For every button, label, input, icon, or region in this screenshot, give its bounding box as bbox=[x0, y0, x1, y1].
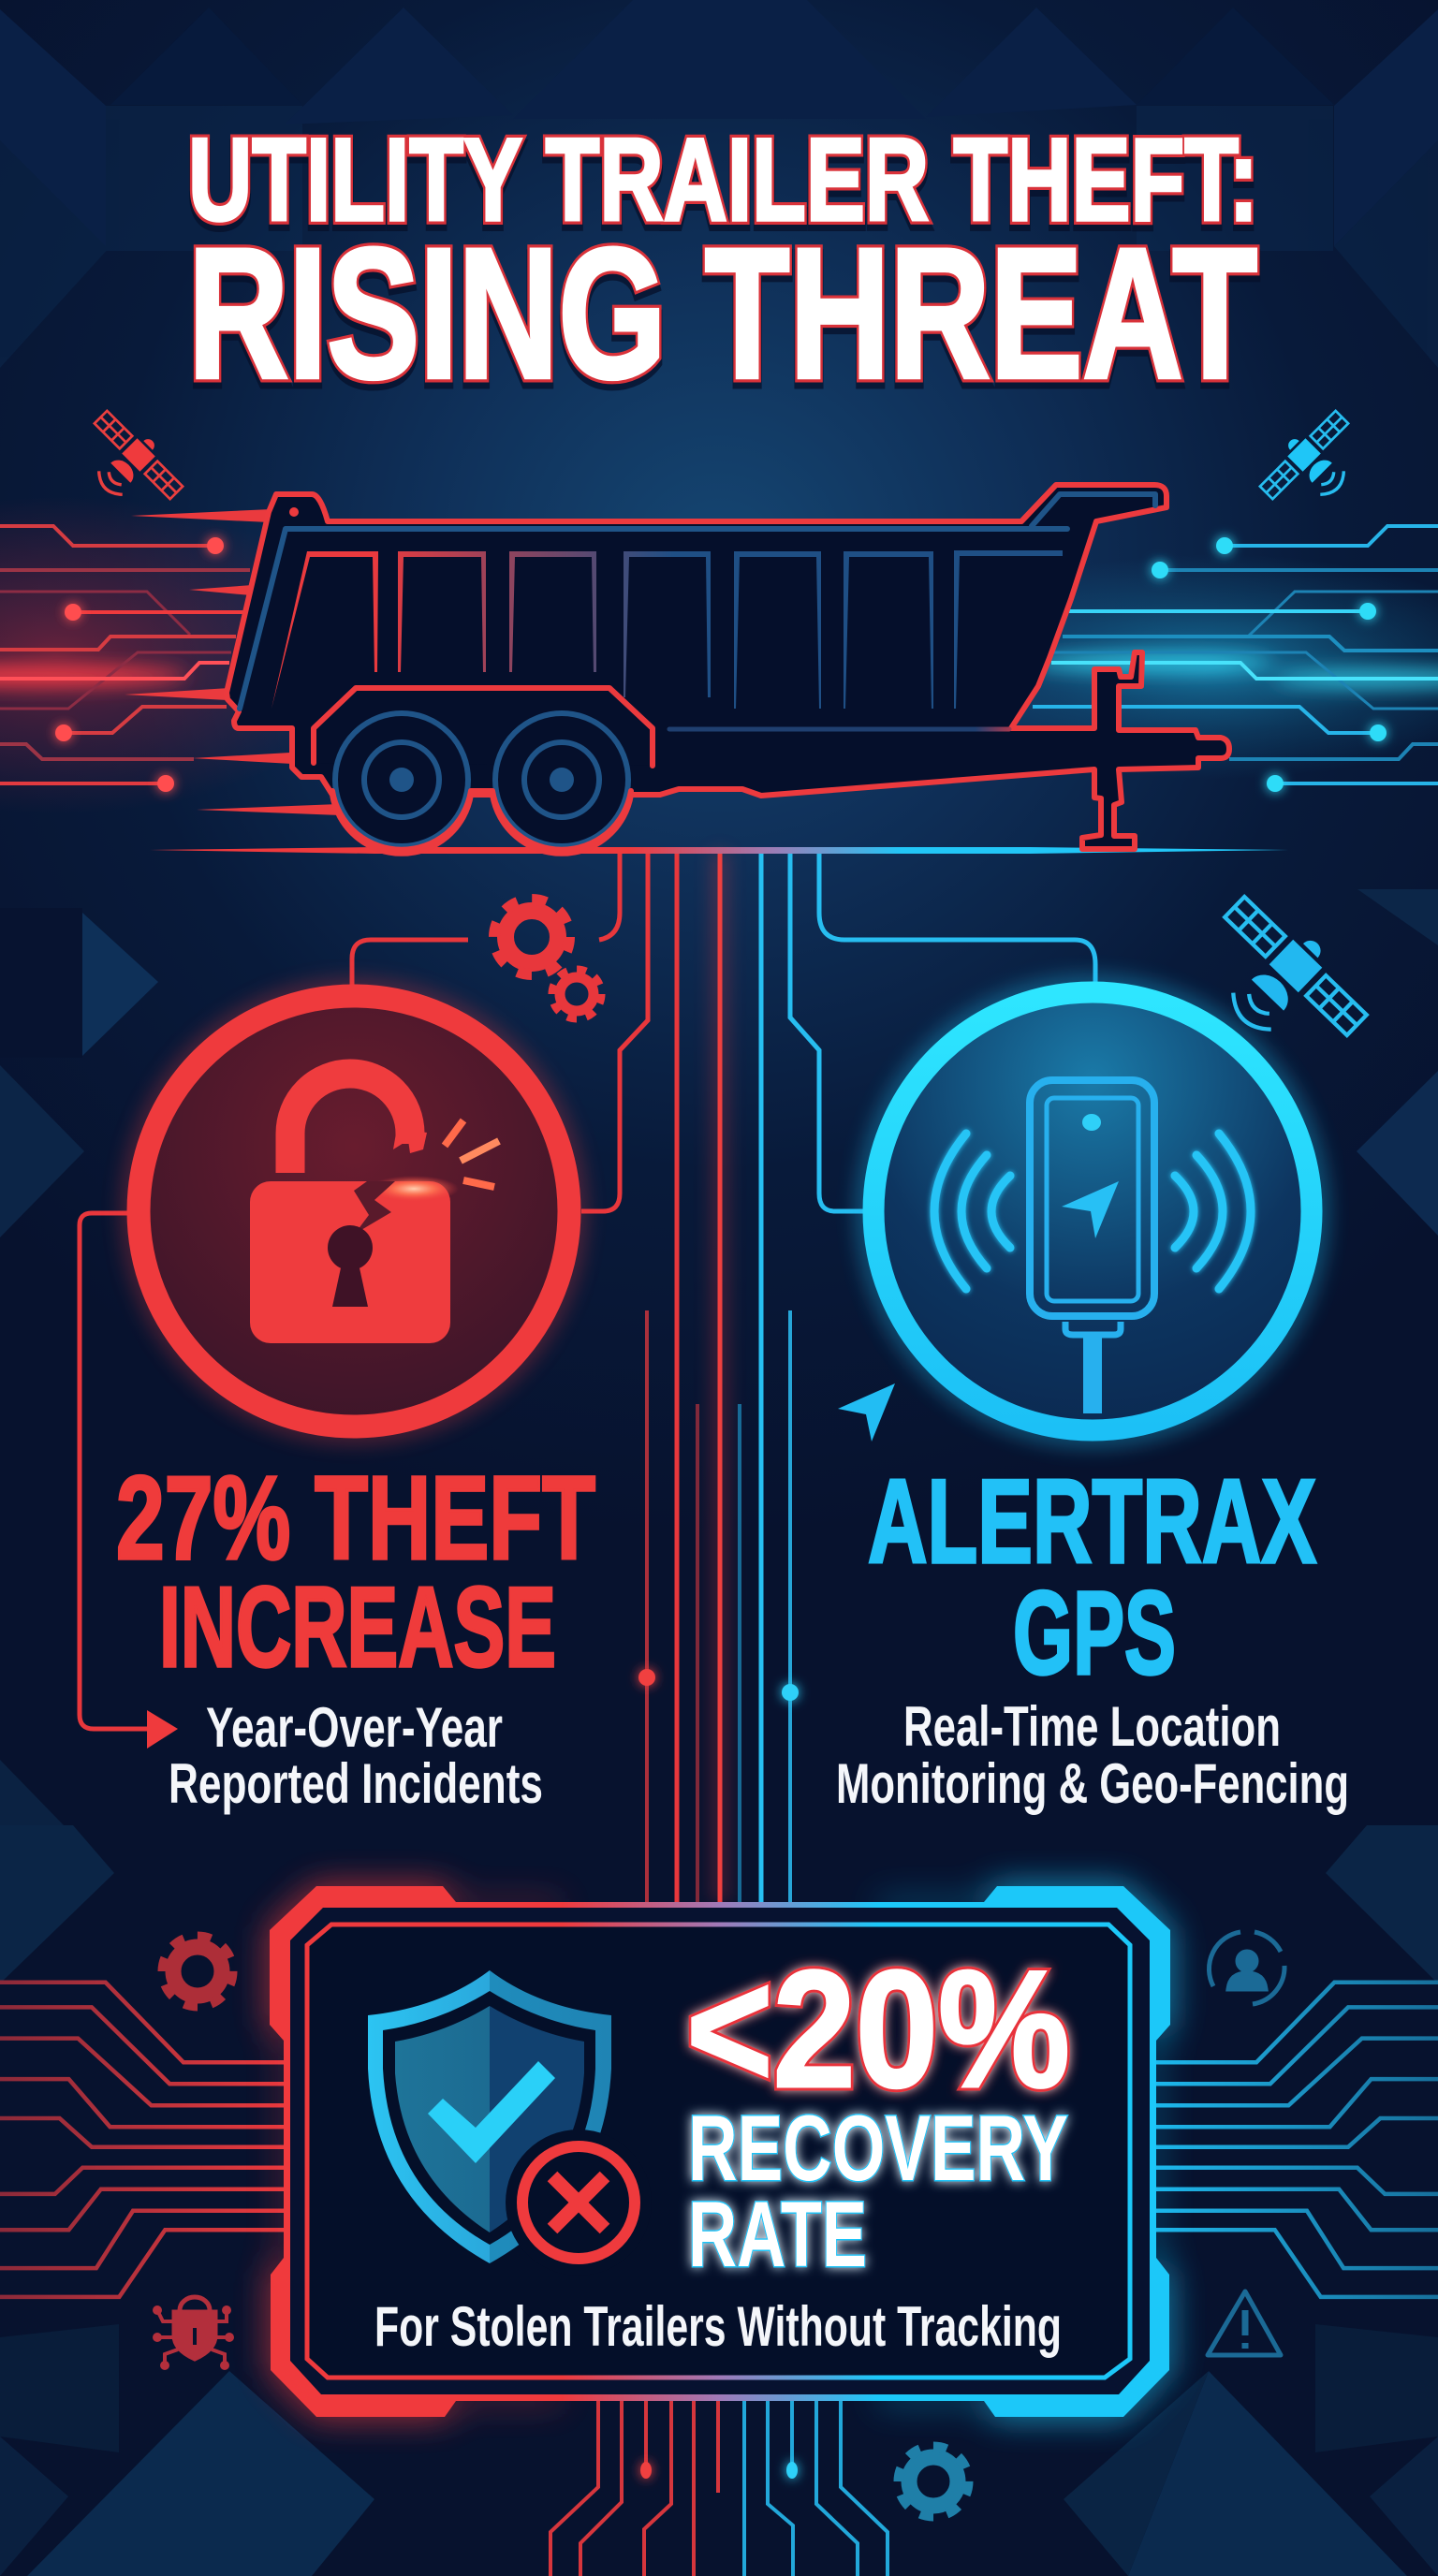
icon: blue gear bbox=[899, 2447, 968, 2516]
icon: signal waves bbox=[934, 1134, 1251, 1289]
red connector circuits to threat circle bbox=[80, 850, 648, 1729]
icon: gps tracker device bbox=[1030, 1080, 1154, 1413]
panel: theft increase bbox=[116, 900, 601, 1815]
stat heading bbox=[116, 1452, 595, 1690]
frame fill bbox=[290, 1906, 1150, 2396]
icon: broken padlock bbox=[250, 1074, 499, 1343]
icon: large satellite bbox=[1182, 885, 1379, 1079]
hinge hole bbox=[289, 507, 299, 517]
stat heading: INCREASE bbox=[159, 1563, 556, 1690]
icon: nav arrow bbox=[838, 1383, 895, 1442]
stat heading: GPS bbox=[1013, 1567, 1176, 1699]
title bbox=[188, 115, 1258, 422]
icon: red x badge bbox=[506, 2130, 652, 2276]
trailer body silhouette bbox=[227, 485, 1229, 854]
icon: gears bbox=[494, 900, 601, 1018]
panel: alertrax gps bbox=[836, 885, 1379, 1815]
central vertical connector lines bbox=[638, 850, 799, 1902]
blue connector circuits to GPS circle bbox=[790, 850, 1095, 1211]
stat subtext: Year-Over-Year bbox=[206, 1696, 503, 1759]
left chip circuit traces bbox=[0, 1983, 285, 2297]
stat: less than 20 percent: <20% bbox=[686, 1936, 1070, 2122]
right chip circuit traces bbox=[1155, 1983, 1438, 2297]
stat subtext bbox=[169, 1696, 543, 1815]
stat: recovery rate bbox=[688, 2096, 1068, 2286]
blue gps circle bbox=[855, 973, 1330, 1449]
stat heading bbox=[868, 1455, 1316, 1699]
bed ribs bbox=[271, 550, 1063, 709]
stat: less than 20 percent: <20% bbox=[686, 1936, 1070, 2122]
recovery subtext: For Stolen Trailers Without Tracking bbox=[374, 2295, 1062, 2358]
stat: recovery rate: RATE bbox=[688, 2182, 867, 2286]
left red circuit traces by trailer bbox=[0, 496, 365, 814]
right blue circuit traces by trailer bbox=[908, 526, 1438, 792]
frame red band bbox=[270, 1886, 562, 2417]
stat heading: 27% THEFT bbox=[116, 1452, 595, 1584]
stat subtext: Reported Incidents bbox=[169, 1752, 543, 1815]
frame gradient strips bbox=[562, 1902, 878, 2401]
trailer illustration bbox=[125, 485, 1229, 854]
wheel lower arcs bbox=[332, 791, 631, 850]
icon: warning triangle bbox=[1208, 2291, 1281, 2355]
inner panel bbox=[307, 1925, 1130, 2378]
arrow: red pointer to subtext bbox=[147, 1710, 178, 1749]
speed needles bbox=[125, 509, 341, 815]
bed blue lines bbox=[240, 494, 1155, 709]
ground line under trailer bbox=[150, 847, 1288, 854]
stat subtext bbox=[836, 1695, 1349, 1815]
red lock circle bbox=[120, 977, 588, 1445]
frame glow bbox=[270, 1886, 1170, 2417]
icon: shield with check bbox=[368, 1970, 611, 2263]
fender bbox=[314, 688, 653, 766]
panel: recovery rate bbox=[270, 1886, 1170, 2417]
wheels bbox=[335, 713, 628, 846]
icon: user cycle bbox=[1209, 1932, 1284, 2004]
stat subtext: Real-Time Location bbox=[903, 1695, 1281, 1758]
icon: blue satellite bbox=[1253, 403, 1375, 526]
icon: red satellite bbox=[67, 403, 190, 526]
frame blue band bbox=[878, 1886, 1170, 2417]
stat: recovery rate: RECOVERY bbox=[688, 2096, 1068, 2200]
icon: red gear bbox=[163, 1937, 232, 2006]
bottom circuit traces bbox=[550, 2396, 888, 2576]
icon: bug lock bbox=[153, 2297, 234, 2370]
